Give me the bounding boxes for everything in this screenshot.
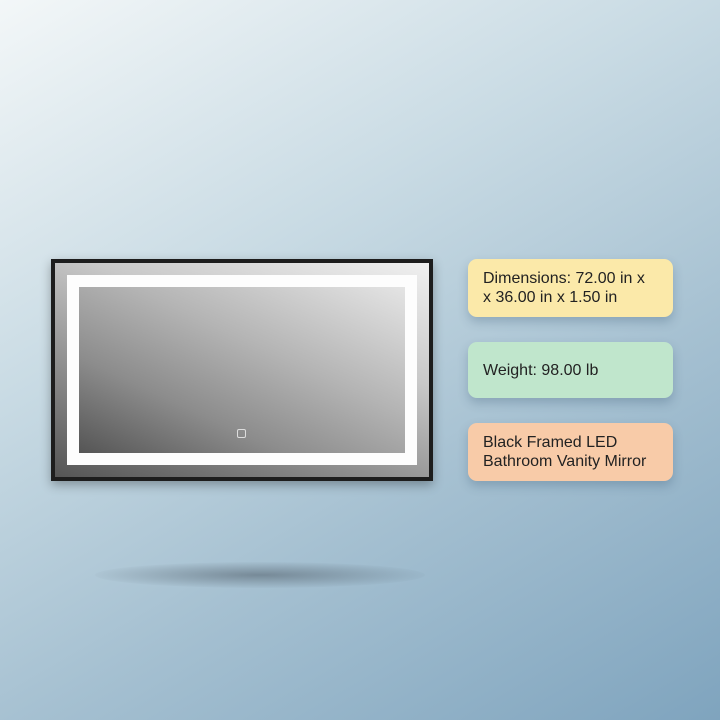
card: product name: Bathroom Vanity Mirror <box>483 453 646 470</box>
card: weight <box>468 342 673 398</box>
mirror backing <box>55 263 429 477</box>
card: product name <box>468 423 673 481</box>
card: product name: Black Framed LED <box>483 434 617 451</box>
card: dimensions <box>468 259 673 317</box>
card: dimensions: Dimensions: 72.00 in x <box>483 270 645 287</box>
card: dimensions: x 36.00 in x 1.50 in <box>483 289 617 306</box>
mirror <box>51 259 433 481</box>
floor shadow <box>95 562 425 588</box>
LED light band <box>67 275 417 465</box>
icon: touch switch <box>237 429 246 438</box>
card: weight: Weight: 98.00 lb <box>483 362 598 378</box>
mirror glass <box>79 287 405 453</box>
